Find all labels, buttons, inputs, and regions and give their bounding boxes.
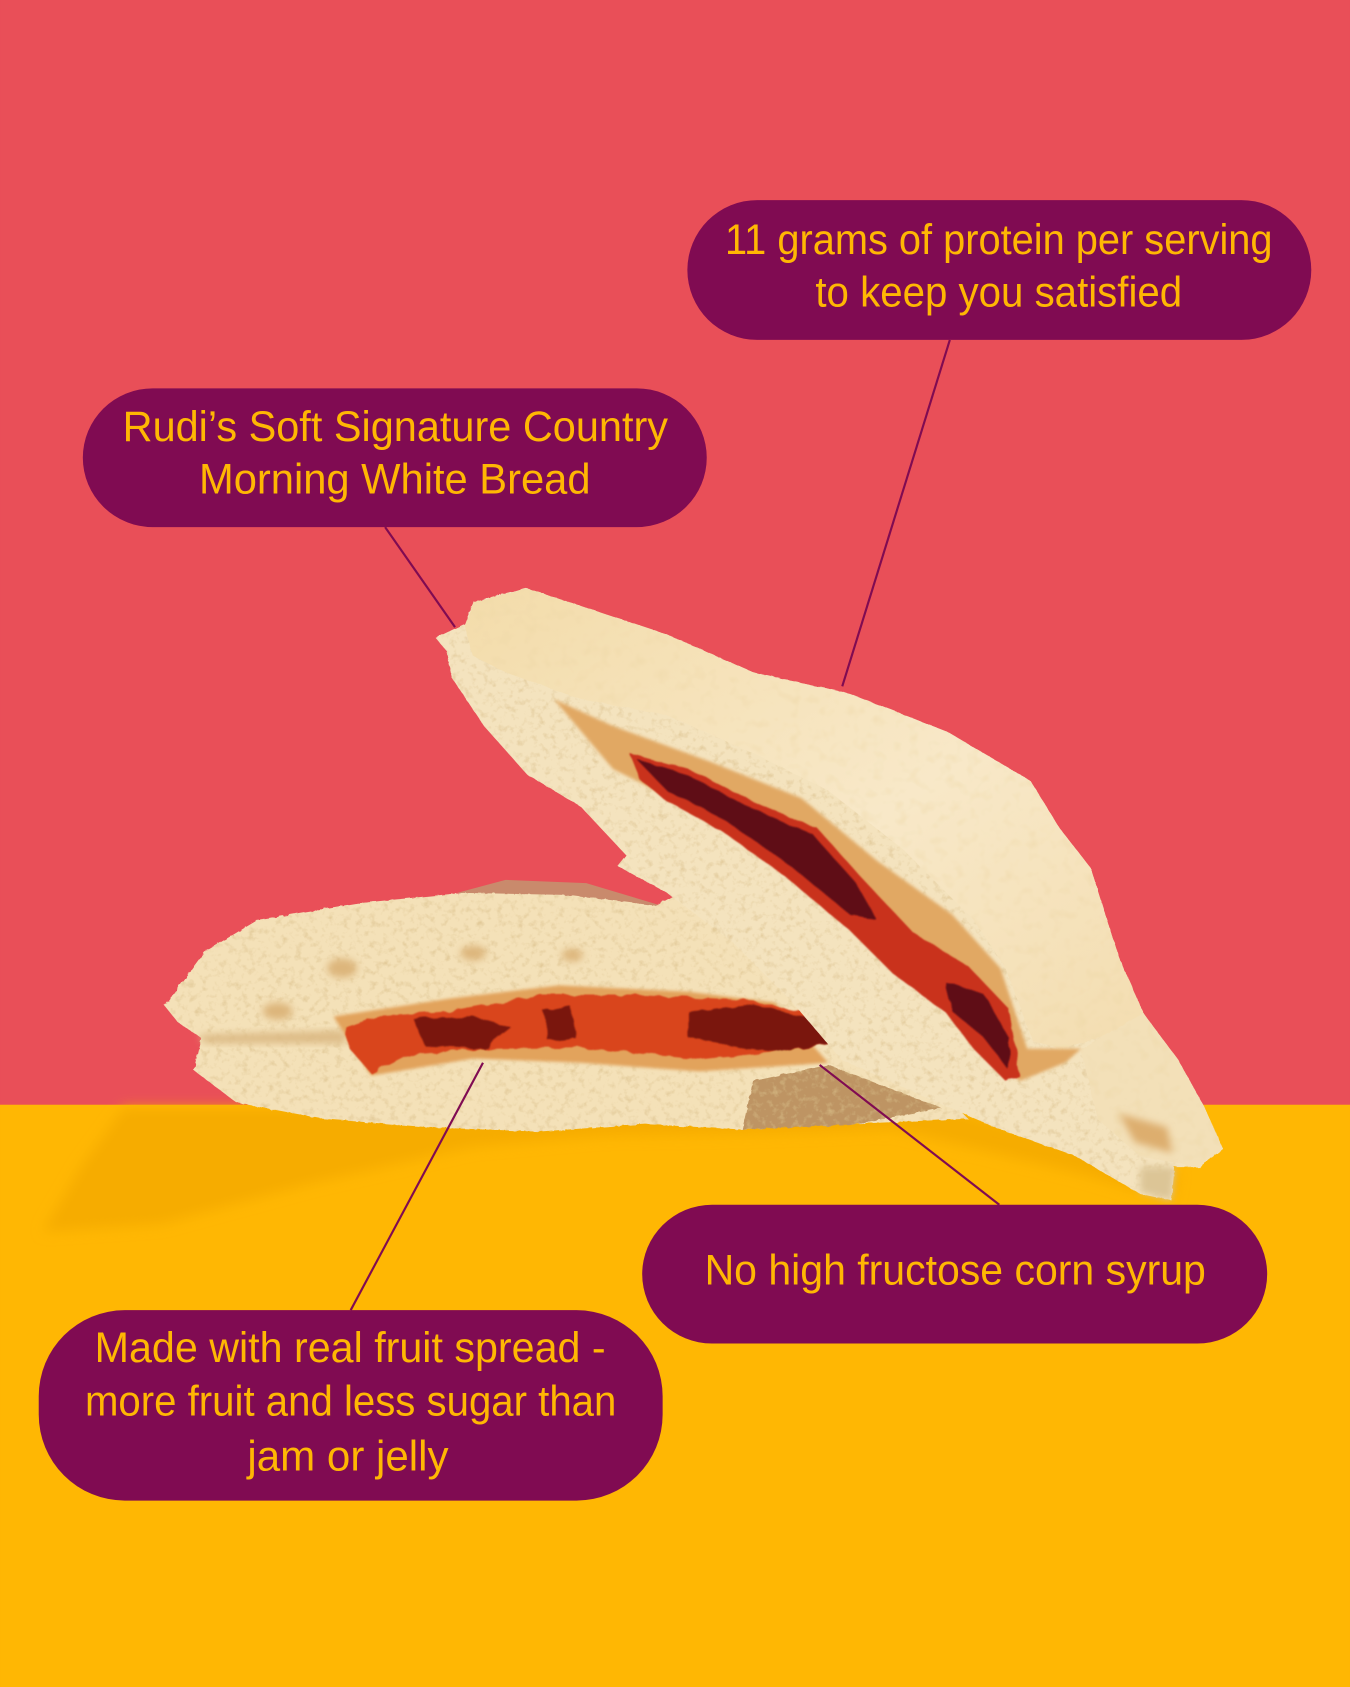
lower half: dark jam patches: [414, 1004, 852, 1052]
leader line: corn syrup callout: [820, 1065, 999, 1205]
leader line: fruit spread callout: [351, 1063, 483, 1310]
callout: corn syrup: No high fructose corn syrup: [705, 1246, 1206, 1294]
lower half: brown crust corner: [742, 1065, 941, 1129]
photo: peanut butter and jelly sandwich: [165, 588, 1223, 1200]
callout: fruit spread: jam or jelly: [245, 1432, 449, 1480]
upper half: end crust corner: [1081, 1013, 1223, 1167]
callout: fruit spread: [39, 1310, 663, 1501]
lower half: jam: [346, 995, 857, 1074]
sandwich shadow on surface: [43, 1108, 1178, 1232]
lower half: slice seam: [199, 1031, 346, 1043]
background: coral wall: [0, 0, 1350, 1106]
callout: protein: 11 grams of protein per serving: [725, 216, 1273, 264]
leader line: bread callout: [385, 527, 455, 627]
callout: fruit spread: more fruit and less sugar than: [85, 1378, 616, 1426]
upper half: end crust dent: [1119, 1113, 1173, 1153]
callout: corn syrup: [642, 1205, 1267, 1344]
callout: bread: Rudi’s Soft Signature Country: [123, 403, 668, 451]
upper half: crust top slice: [465, 588, 1143, 1049]
callout: bread: Morning White Bread: [199, 456, 591, 504]
background: yellow surface: [0, 1105, 1350, 1687]
callout: fruit spread: Made with real fruit spread -: [95, 1324, 606, 1372]
back slice of lower half: [457, 880, 672, 914]
upper half: bread crumb: [436, 588, 1223, 1200]
upper half: jam: [629, 753, 1020, 1081]
lower half: peanut butter: [333, 985, 828, 1076]
upper half: tail shade: [1140, 1167, 1175, 1200]
upper half: dark jam patches: [637, 759, 1009, 1070]
leader line: protein callout: [842, 340, 950, 686]
callout: protein: to keep you satisfied: [815, 269, 1182, 317]
callout: bread: [83, 388, 707, 527]
callout: protein: [687, 200, 1311, 340]
lower half: bread: [165, 887, 968, 1132]
lower half: crumb holes: [262, 946, 583, 1020]
upper half: peanut butter: [554, 699, 1081, 1081]
